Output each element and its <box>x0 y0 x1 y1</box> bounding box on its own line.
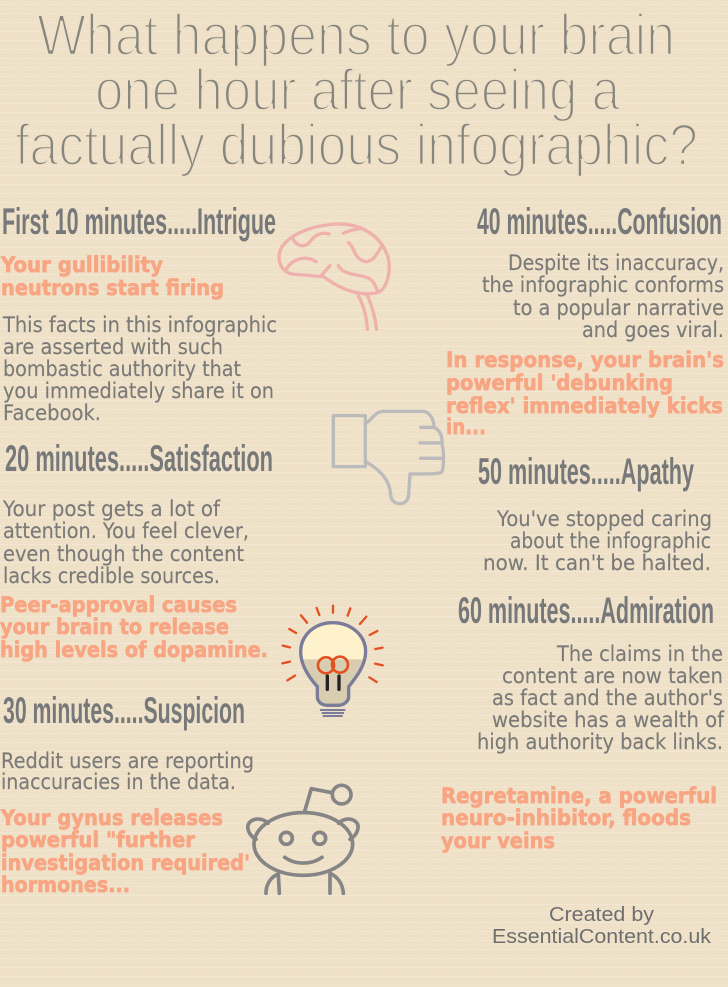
text block: intrigue: bombastic authority that <box>3 357 241 381</box>
text block: apathy: now. It can't be halted. <box>483 551 711 575</box>
credit: Created by <box>549 904 654 926</box>
title: one hour after seeing a <box>95 58 621 123</box>
icon: thumbs down <box>333 411 443 504</box>
text block: apathy <box>483 507 712 575</box>
panel: 40 minutes <box>446 201 724 439</box>
callout: gullibility neutrons <box>0 253 224 300</box>
callout: gullibility neutrons: neutrons start firing <box>1 276 224 300</box>
credit <box>492 904 712 948</box>
text block: suspicion <box>1 749 254 794</box>
callout: peer approval <box>0 593 268 662</box>
text block: apathy: You've stopped caring <box>496 507 712 531</box>
callout: gynus <box>0 806 250 897</box>
callout: regretamine: Regretamine, a powerful <box>441 784 717 808</box>
title <box>15 3 698 178</box>
callout: debunking reflex: powerful 'debunking <box>446 371 673 395</box>
callout: gullibility neutrons: Your gullibility <box>0 253 163 277</box>
heading: suspicion: 30 minutes.....Suspicion <box>3 690 245 731</box>
text block: satisfaction: even though the content <box>3 542 244 566</box>
callout: gynus: investigation required' <box>1 851 250 875</box>
callout: debunking reflex: in... <box>446 415 486 439</box>
text block: intrigue: Facebook. <box>3 401 101 425</box>
text block: intrigue: are asserted with such <box>3 335 223 359</box>
text block: confusion <box>482 251 724 342</box>
text block: suspicion: Reddit users are reporting <box>1 749 254 773</box>
panel: 60 minutes <box>441 590 725 853</box>
panel: 30 minutes <box>0 690 254 897</box>
panel: 20 minutes <box>0 438 273 662</box>
panel: first 10 minutes <box>0 201 277 425</box>
callout: gynus: Your gynus releases <box>0 806 223 830</box>
text block: satisfaction: attention. You feel clever, <box>3 519 249 543</box>
callout: peer approval: high levels of dopamine. <box>0 638 268 662</box>
callout: gynus: hormones... <box>1 873 130 897</box>
text block: admiration <box>477 642 725 754</box>
callout: debunking reflex <box>446 348 724 439</box>
callout: regretamine: neuro-inhibitor, floods <box>441 806 691 830</box>
heading: satisfaction: 20 minutes.....Satisfaction <box>5 438 273 479</box>
callout: peer approval: your brain to release <box>0 615 229 639</box>
icon: reddit alien <box>248 785 358 893</box>
icon: light bulb <box>282 606 383 716</box>
callout: regretamine: your veins <box>441 829 555 853</box>
text block: satisfaction: Your post gets a lot of <box>2 497 221 521</box>
icon: brain <box>279 224 389 329</box>
heading: intrigue: First 10 minutes.....Intrigue <box>2 201 276 242</box>
callout: gynus: powerful "further <box>1 828 196 852</box>
text block: satisfaction <box>2 497 249 588</box>
credit: EssentialContent.co.uk <box>492 926 712 948</box>
text block: intrigue: This facts in this infographic <box>2 313 277 337</box>
text block: intrigue <box>2 313 277 425</box>
text block: satisfaction: lacks credible sources. <box>3 564 220 588</box>
callout: regretamine <box>441 784 717 853</box>
callout: peer approval: Peer-approval causes <box>0 593 237 617</box>
text block: suspicion: inaccuracies in the data. <box>1 770 236 794</box>
panel: 50 minutes <box>478 451 712 575</box>
text block: intrigue: you immediately share it on <box>3 379 274 403</box>
